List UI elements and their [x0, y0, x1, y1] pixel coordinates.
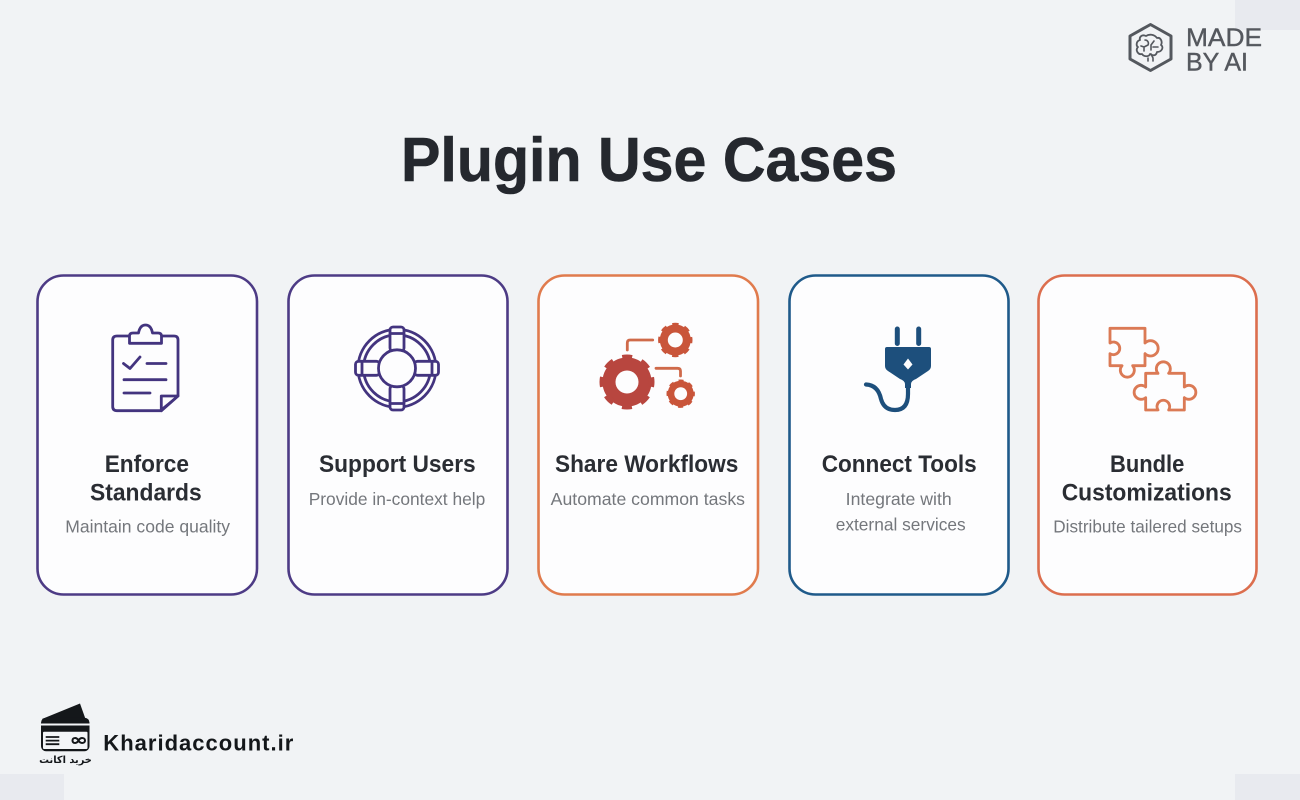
connector lines: [627, 340, 680, 376]
description: Distribute tailered setups: [1053, 517, 1242, 537]
card frame: [38, 276, 257, 594]
card frame: [288, 276, 508, 594]
panel: Connect Tools: [790, 276, 1008, 594]
heading: Share Workflows: [555, 451, 738, 478]
description: Automate common tasks: [551, 489, 745, 509]
description: [836, 489, 966, 535]
title: Plugin Use Cases: [401, 126, 897, 195]
lower small gear: [668, 381, 693, 406]
logo text: [1186, 24, 1262, 76]
card frame: [790, 276, 1008, 594]
upper small gear: [660, 325, 690, 355]
logo text: BY AI: [1186, 48, 1248, 76]
panel: Share Workflows: [538, 276, 758, 594]
heading: Standards: [90, 480, 202, 507]
logo: Made by AI: [1130, 24, 1262, 76]
panel: Enforce Standards: [38, 276, 257, 594]
description: external services: [836, 515, 966, 535]
icon: lifebuoy: [356, 327, 438, 410]
large gear: [602, 358, 652, 406]
icon: brain in hexagon: [1130, 24, 1171, 70]
card frame: [538, 276, 758, 594]
heading: Enforce: [105, 451, 189, 478]
logo text: MADE: [1186, 24, 1262, 52]
icon: clipboard checklist: [113, 325, 178, 411]
logo caption: خرید اکانت: [39, 755, 92, 766]
icon: power plug: [866, 329, 931, 410]
heading: [90, 451, 202, 507]
logo text: Kharidaccount.ir: [103, 730, 294, 755]
panel: Support Users: [288, 276, 508, 594]
card frame: [1038, 276, 1256, 594]
icon: bank card: [41, 704, 90, 751]
heading: Bundle: [1110, 451, 1184, 478]
heading: [1062, 451, 1232, 507]
logo: Kharidaccount: [39, 704, 294, 766]
heading: Connect Tools: [822, 451, 977, 478]
heading: Customizations: [1062, 480, 1232, 507]
heading: Support Users: [319, 451, 476, 478]
icon: workflow gears: [602, 325, 693, 406]
description: Provide in-context help: [309, 489, 485, 509]
panel: Bundle Customizations: [1038, 276, 1256, 594]
icon: puzzle pieces: [1110, 328, 1196, 410]
description: Integrate with: [846, 489, 952, 509]
description: Maintain code quality: [65, 517, 230, 537]
